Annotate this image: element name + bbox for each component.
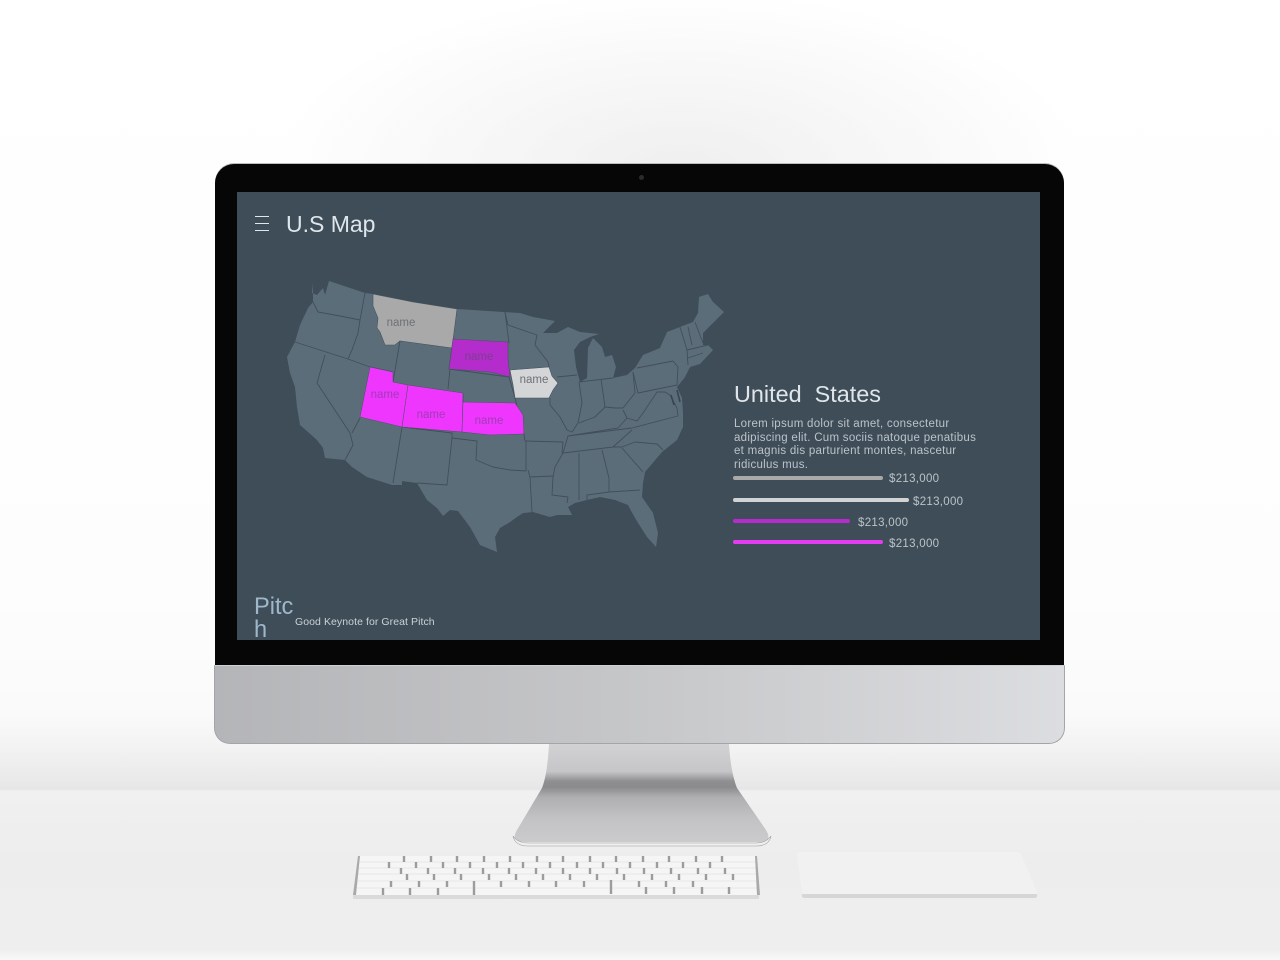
state: Utah xyxy=(360,367,408,427)
state: Colorado: name xyxy=(417,409,445,421)
bar row 4: $213,000 xyxy=(889,538,939,550)
body text xyxy=(734,418,976,470)
monitor xyxy=(214,163,1065,744)
state: South Dakota xyxy=(449,339,510,377)
screen panel xyxy=(237,192,1040,640)
map land xyxy=(287,281,724,552)
bar row 2 xyxy=(733,496,963,508)
state: Montana xyxy=(373,294,457,348)
bar row 3: $213,000 xyxy=(858,517,908,529)
body text: adipiscing elit. Cum sociis natoque penatibus xyxy=(734,432,976,444)
monitor chin xyxy=(214,665,1065,744)
state: Iowa: name xyxy=(520,374,548,386)
tagline: Good Keynote for Great Pitch xyxy=(295,616,435,628)
state: South Dakota: name xyxy=(465,351,493,363)
bar row 3 xyxy=(733,517,908,529)
state: Utah: name xyxy=(371,389,399,401)
keyboard key gaps xyxy=(383,856,733,895)
body text: et magnis dis parturient montes, nascetur xyxy=(734,445,956,457)
icon: menu xyxy=(255,216,269,231)
bar row 1 xyxy=(733,473,939,485)
state: Montana: name xyxy=(387,317,415,329)
state: Kansas xyxy=(462,402,524,435)
heading: United States: United States xyxy=(734,381,881,407)
bar row 1: $213,000 xyxy=(889,473,939,485)
bar row 4 xyxy=(733,538,939,550)
state: Colorado xyxy=(402,385,463,432)
body text: Lorem ipsum dolor sit amet, consectetur xyxy=(734,418,949,430)
state: Kansas: name xyxy=(475,415,503,427)
bar row 2: $213,000 xyxy=(913,496,963,508)
monitor bezel xyxy=(215,164,1064,665)
title: U.S Map xyxy=(286,211,375,237)
map state borders xyxy=(295,293,708,512)
body text: ridiculus mus. xyxy=(734,458,808,470)
state: Iowa xyxy=(510,367,558,398)
webcam xyxy=(639,175,644,180)
